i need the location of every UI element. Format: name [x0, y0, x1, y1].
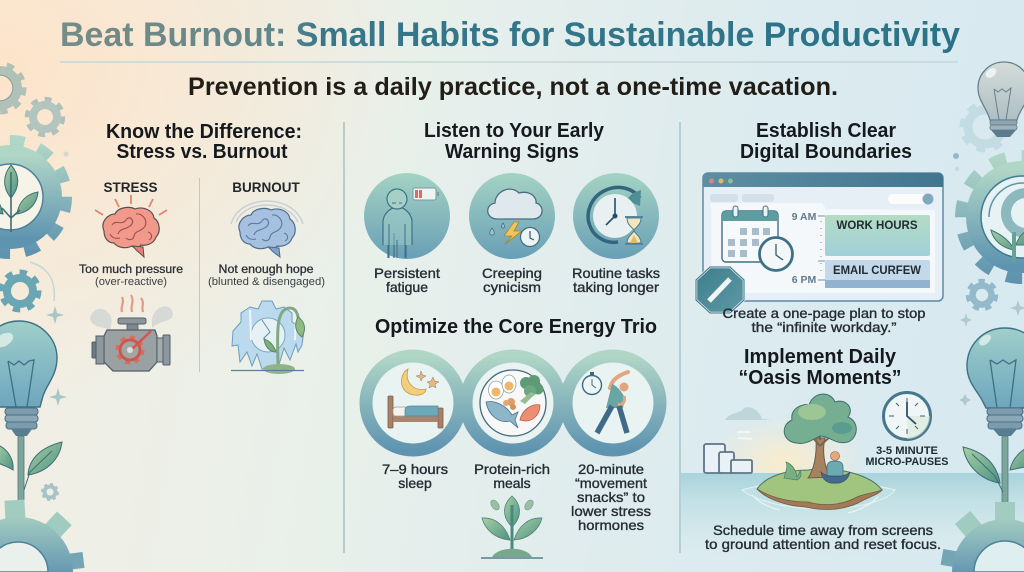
- panel: core energy trio: [366, 316, 660, 558]
- ring: movement: [573, 363, 653, 443]
- icon: devices: [704, 444, 752, 473]
- icon: protein plate: [480, 370, 546, 436]
- text: schedule time away: Schedule time away from screens: [713, 522, 933, 538]
- subtitle: Prevention is a daily practice, not a one-time vacation.: [188, 73, 838, 101]
- block: email curfew: [825, 260, 930, 288]
- icon: overheated brain: [95, 195, 167, 257]
- text: movement snacks: lower stress: [571, 503, 651, 519]
- panel: oasis moments: [704, 346, 948, 552]
- title: Beat Burnout: Small Habits for Sustainable Productivity: [60, 16, 960, 54]
- text: sleep: sleep: [398, 475, 432, 491]
- heading: early warning signs: Listen to Your Early: [424, 120, 605, 142]
- heading: oasis moments: “Oasis Moments”: [738, 367, 902, 389]
- scene: sea and sky: [681, 407, 1024, 560]
- ring: sleep: [373, 363, 453, 443]
- icon: overheated engine: [90, 295, 173, 371]
- text: creeping cynicism: cynicism: [483, 279, 541, 295]
- text: persistent fatigue: Persistent: [374, 265, 440, 281]
- block: work hours: [825, 215, 930, 256]
- label: burnout: BURNOUT: [232, 180, 300, 195]
- panel: digital boundaries: [696, 120, 943, 335]
- block: work hours: WORK HOURS: [836, 218, 918, 232]
- heading: early warning signs: Warning Signs: [445, 141, 579, 163]
- text: movement snacks: snacks” to: [577, 489, 645, 505]
- text: too much pressure: Too much pressure: [79, 264, 183, 276]
- text: routine tasks: taking longer: [573, 279, 659, 295]
- card: persistent fatigue: [364, 173, 450, 295]
- text: meals: meals: [493, 475, 531, 491]
- icon: gray light bulb: [953, 62, 1024, 171]
- heading: know the difference: Stress vs. Burnout: [116, 141, 288, 163]
- text: routine tasks: Routine tasks: [572, 265, 660, 281]
- left decoration: gears, bulb and plant: [0, 64, 84, 572]
- chain of rings: [366, 356, 660, 450]
- icon: bottom gear: [0, 500, 84, 572]
- text: not enough hope: Not enough hope: [218, 264, 314, 276]
- panel: early warning signs: [364, 120, 660, 295]
- text: blunted and disengaged: (blunted & disengaged): [208, 276, 325, 288]
- icon: island with tree and person: [742, 394, 895, 513]
- icon: small gear: [27, 99, 63, 135]
- icon: stretching person with stopwatch: [582, 372, 628, 433]
- icon: moon and bed: [388, 369, 443, 428]
- icon: teal light bulb: [963, 328, 1024, 506]
- label: stress: STRESS: [103, 180, 158, 195]
- icon: small gray gear top: [0, 64, 24, 112]
- text: sleep: 7–9 hours: [382, 461, 448, 477]
- heading: know the difference: Know the Difference:: [106, 121, 302, 143]
- text: persistent fatigue: fatigue: [386, 279, 428, 295]
- text: meals: Protein-rich: [474, 461, 550, 477]
- text: over-reactive: (over-reactive): [95, 276, 167, 288]
- text: one-page plan: the “infinite workday.”: [752, 319, 897, 335]
- column: burnout: [208, 180, 325, 374]
- block: email curfew: EMAIL CURFEW: [833, 263, 922, 277]
- heading: digital boundaries: Digital Boundaries: [740, 141, 912, 163]
- icon: large gear with plant: [0, 142, 65, 252]
- icon: wall clock: [884, 392, 930, 440]
- icon: frozen gear with wilting plant: [231, 301, 305, 374]
- icon: stop sign: [696, 267, 744, 313]
- text: one-page plan: Create a one-page plan to stop: [722, 305, 926, 321]
- text: movement snacks: “movement: [575, 475, 647, 491]
- label: 9 AM: 9 AM: [792, 211, 817, 223]
- text: movement snacks: hormones: [578, 517, 644, 533]
- card: creeping cynicism: [469, 173, 555, 295]
- browser window: [703, 173, 943, 301]
- text: schedule time away: to ground attention and reset focus.: [705, 536, 941, 552]
- icon: small gear: [968, 281, 996, 309]
- heading: digital boundaries: Establish Clear: [756, 120, 896, 142]
- heading: oasis moments: Implement Daily: [744, 346, 897, 368]
- ring: food: [473, 363, 553, 443]
- panel: stress vs burnout: [79, 121, 325, 374]
- icon: clock with hourglass: [573, 173, 659, 259]
- heading: core energy trio: Optimize the Core Energy Trio: [375, 316, 657, 338]
- text: movement snacks: 20-minute: [578, 461, 644, 477]
- card: routine tasks: [572, 173, 660, 295]
- icon: teal gear: [1, 262, 54, 310]
- icon: calendar with clock: [722, 206, 792, 270]
- icon: sprouting plant: [481, 496, 543, 558]
- icon: sparkles: [959, 300, 1024, 406]
- icon: storm cloud with clock: [469, 173, 555, 259]
- label: micro-pauses: 3-5 MINUTE: [876, 445, 938, 457]
- icon: sparkles and tiny gear: [42, 152, 68, 500]
- text: creeping cynicism: Creeping: [482, 265, 542, 281]
- label: 6 PM: 6 PM: [792, 274, 817, 286]
- right decoration: bulbs, gears and plant: [941, 62, 1024, 572]
- icon: bottom gear: [941, 502, 1024, 572]
- icon: pale gear: [962, 104, 1008, 150]
- label: micro-pauses: MICRO-PAUSES: [866, 456, 948, 468]
- icon: tired person with low battery: [364, 173, 450, 259]
- icon: light bulb: [0, 321, 62, 502]
- column: stress: [79, 180, 183, 371]
- icon: large gear with plant: [962, 157, 1024, 277]
- icon: blunted brain: [231, 201, 303, 257]
